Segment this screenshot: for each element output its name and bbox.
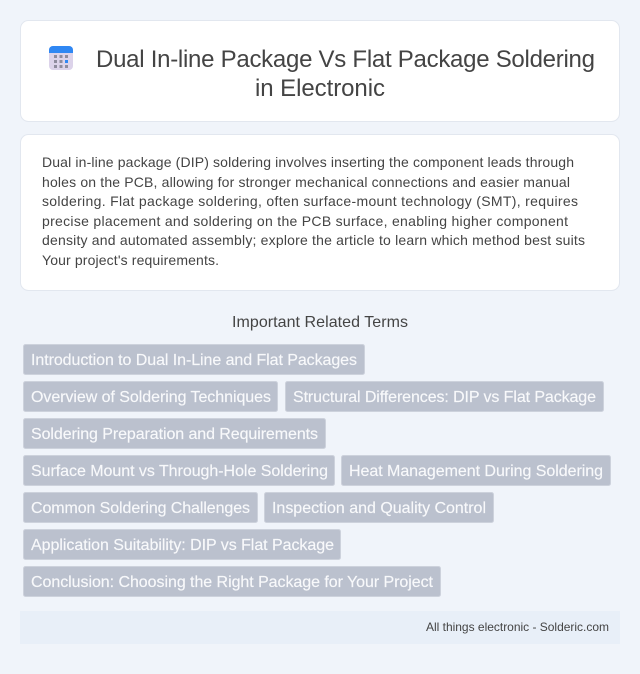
footer: All things electronic - Solderic.com: [426, 620, 609, 634]
tag: challenges: [24, 492, 258, 522]
tag: overview: [24, 382, 278, 412]
text block: description: holes on the PCB, allowing for stronger mechanical connections and easier manual: [42, 174, 570, 190]
text block: description: [42, 154, 585, 268]
title: in Electronic: [255, 75, 385, 102]
text block: description: Your project's requirements.: [42, 252, 219, 268]
text block: description: Dual in-line package (DIP) soldering involves inserting the component leads through: [42, 154, 574, 170]
footer: [20, 611, 620, 644]
icon: calendar grid: [49, 46, 73, 70]
tag: conclusion: Conclusion: Choosing the Right Package for Your Project: [31, 574, 434, 591]
title: Dual In-line Package Vs Flat Package Soldering: [96, 46, 595, 73]
title: [96, 46, 595, 102]
tag: structural differences: Structural Differences: DIP vs Flat Package: [293, 389, 596, 406]
tag: challenges: Common Soldering Challenges: [31, 500, 250, 517]
tag: heat management: Heat Management During Soldering: [349, 463, 603, 480]
tag: inspection: Inspection and Quality Control: [272, 500, 486, 517]
text block: description: density and automated assembly; explore the article to learn which method best suits: [42, 232, 585, 248]
tag: preparation: [24, 418, 326, 448]
heading: related terms: Important Related Terms: [232, 314, 408, 331]
panel: description: [20, 134, 620, 290]
tag: heat management: [342, 456, 610, 486]
tag: structural differences: [286, 382, 604, 412]
tag: surface mount: Surface Mount vs Through-Hole Soldering: [31, 463, 328, 480]
tag: surface mount: [24, 456, 334, 486]
tag: introduction: Introduction to Dual In-Line and Flat Packages: [31, 352, 357, 369]
tag: inspection: [264, 492, 494, 522]
tag: introduction: [24, 344, 364, 374]
tag: conclusion: [24, 566, 440, 596]
panel: title header: [20, 20, 620, 122]
tag: application: Application Suitability: DIP vs Flat Package: [31, 537, 334, 554]
text block: description: precise placement and soldering on the PCB surface, enabling higher component: [42, 213, 568, 229]
tag: preparation: Soldering Preparation and Requirements: [31, 426, 318, 443]
text block: description: soldering. Flat package soldering, often surface-mount technology (SMT), requires: [42, 193, 578, 209]
tag: application: [24, 530, 340, 560]
tag: overview: Overview of Soldering Techniques: [31, 389, 271, 406]
